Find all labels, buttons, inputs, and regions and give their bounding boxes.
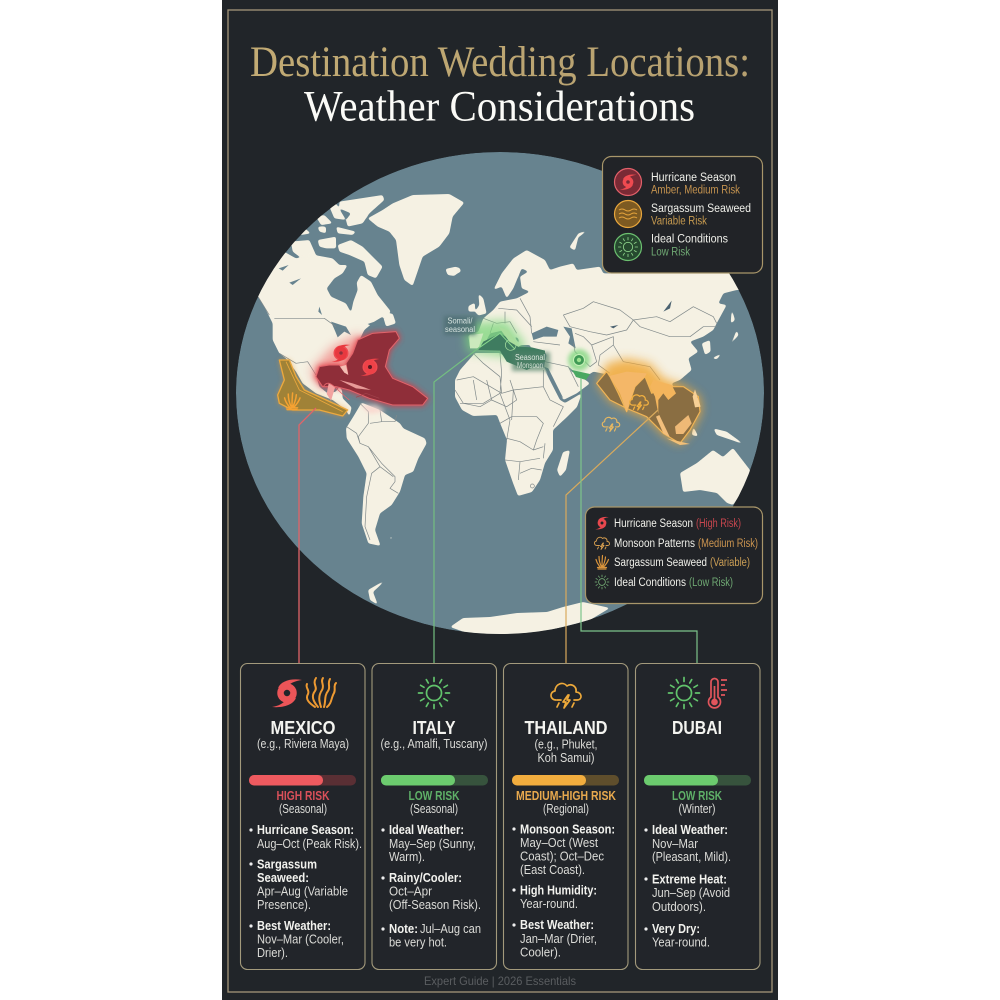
connector: dubai xyxy=(581,378,697,664)
bullets: mexico: Hurricane Season: xyxy=(257,823,354,837)
bullets: dubai: Jun–Sep (Avoid xyxy=(652,886,730,900)
risk label: low xyxy=(672,789,722,816)
label: faint seasonal tag east xyxy=(512,352,550,371)
bullets: dubai xyxy=(644,823,731,950)
bullets: mexico xyxy=(249,823,362,960)
icon: seaweed legend xyxy=(614,200,642,228)
land tint: venezuela coast xyxy=(360,405,386,414)
heading: italy: ITALY xyxy=(412,718,456,738)
risk label: high xyxy=(276,789,330,816)
panel: dubai card xyxy=(636,664,760,970)
heading: thailand: THAILAND xyxy=(524,718,608,738)
icon: seaweed small xyxy=(596,556,608,569)
connector: italy xyxy=(434,347,480,664)
icon: sun legend xyxy=(614,234,642,260)
panel: thailand card xyxy=(504,664,628,970)
footer: Expert Guide | 2026 Essentials xyxy=(424,974,576,988)
heading: dubai: DUBAI xyxy=(672,718,722,738)
bullets: italy: May–Sep (Sunny, xyxy=(389,837,476,851)
bullets: mexico: Best Weather: xyxy=(257,919,331,933)
bullets: thailand: Jan–Mar (Drier, xyxy=(520,932,597,946)
label: faint seasonal tag west: seasonal xyxy=(445,325,475,334)
bullets: italy: Jul–Aug can xyxy=(420,922,481,936)
title: Weather Considerations xyxy=(304,84,695,130)
icon: thermometer xyxy=(708,678,727,708)
heading: thailand: (e.g., Phuket, xyxy=(534,738,598,752)
legend text: Monsoon Patterns xyxy=(614,538,695,550)
map overlay: hurricane zone atlantic xyxy=(311,332,428,405)
bullets: dubai: Very Dry: xyxy=(652,922,700,936)
icon: sun xyxy=(668,678,700,708)
risk label: low: LOW RISK xyxy=(408,789,460,803)
bullets: dubai: Nov–Mar xyxy=(652,837,698,851)
risk label: high: (Seasonal) xyxy=(279,802,327,816)
heading: thailand: Koh Samui) xyxy=(538,751,594,765)
legend text xyxy=(651,172,751,258)
map overlay: mediterranean low risk xyxy=(465,320,545,370)
bullets: mexico: Aug–Oct (Peak Risk). xyxy=(257,837,362,851)
icon: monsoon cloud over ocean xyxy=(602,417,620,432)
panel: top legend xyxy=(602,156,762,273)
icon: sargassum on map xyxy=(285,393,300,410)
bullets: thailand: Coast); Oct–Dec xyxy=(520,850,604,864)
icon: monsoon small xyxy=(594,537,610,550)
bullets: italy: Note: xyxy=(389,922,418,936)
gold frame xyxy=(228,10,772,992)
risk bar: medium-high xyxy=(512,775,619,786)
risk label: low: LOW RISK xyxy=(672,789,722,803)
legend text: (Medium Risk) xyxy=(698,538,758,550)
bullets: mexico: Sargassum xyxy=(257,858,317,872)
legend text: Hurricane Season xyxy=(614,518,693,530)
map overlay: dubai ideal marker xyxy=(568,349,590,380)
bullets: dubai: Extreme Heat: xyxy=(652,872,727,886)
bullets: dubai: Outdoors). xyxy=(652,900,706,914)
risk label: low xyxy=(408,789,460,816)
bullets: thailand: May–Oct (West xyxy=(520,836,598,850)
risk bar: high xyxy=(249,775,356,786)
bullets: thailand: Cooler). xyxy=(520,946,561,960)
bullets: italy: (Off-Season Risk). xyxy=(389,898,481,912)
bullets: italy: Rainy/Cooler: xyxy=(389,871,462,885)
legend text: Amber, Medium Risk xyxy=(651,184,740,196)
panel: italy card xyxy=(372,664,496,970)
heading: italy: (e.g., Amalfi, Tuscany) xyxy=(380,737,488,751)
icon: sun xyxy=(418,678,450,708)
bullets: mexico: Apr–Aug (Variable xyxy=(257,884,348,898)
risk label: high: HIGH RISK xyxy=(276,789,330,803)
bullets: mexico: Nov–Mar (Cooler, xyxy=(257,932,344,946)
panel: dark poster background xyxy=(222,0,778,1000)
heading: thailand xyxy=(524,718,608,765)
bullets: thailand: High Humidity: xyxy=(520,884,597,898)
map overlay: southeast asia monsoon zone xyxy=(597,358,702,445)
icon: hurricane legend xyxy=(614,168,642,196)
risk label: low: (Winter) xyxy=(678,802,716,816)
bullets: italy: Oct–Apr xyxy=(389,884,432,898)
legend text: (Variable) xyxy=(710,557,750,569)
risk label: low: (Seasonal) xyxy=(410,802,458,816)
bullets: dubai: Ideal Weather: xyxy=(652,823,728,837)
label: faint seasonal tag east: Seasonal xyxy=(515,353,545,362)
bullets: italy: Ideal Weather: xyxy=(389,823,464,837)
inland water xyxy=(259,265,672,398)
legend text: Hurricane Season xyxy=(651,172,736,184)
icon: seaweed xyxy=(307,678,336,707)
legend text: Ideal Conditions xyxy=(614,577,686,589)
heading: italy xyxy=(380,718,488,751)
bullets: thailand: Monsoon Season: xyxy=(520,822,615,836)
legend text xyxy=(614,518,758,589)
bullets: thailand: Best Weather: xyxy=(520,918,594,932)
bullets: italy: Warm). xyxy=(389,850,425,864)
legend text: (Low Risk) xyxy=(689,577,733,589)
legend text: Variable Risk xyxy=(651,216,707,228)
icon: storm cloud xyxy=(551,684,581,708)
legend text: (High Risk) xyxy=(696,518,741,530)
world map globe xyxy=(236,152,764,636)
bullets: mexico: Seaweed: xyxy=(257,871,309,885)
connector: mexico xyxy=(299,408,316,664)
bullets: mexico: Presence). xyxy=(257,898,311,912)
label: faint seasonal tag west: Somali/ xyxy=(448,316,473,326)
icon: sun small xyxy=(595,575,609,589)
risk label: medium-high: (Regional) xyxy=(543,802,589,816)
risk bar: low xyxy=(381,775,488,786)
connector: thailand xyxy=(566,410,658,664)
icon: hurricane small xyxy=(595,517,609,529)
title: Destination Wedding Locations: xyxy=(250,39,750,86)
title xyxy=(250,39,750,130)
legend text: Sargassum Seaweed xyxy=(614,557,707,569)
country borders xyxy=(256,293,717,540)
panel: mexico card xyxy=(240,664,365,970)
bullets: italy xyxy=(381,823,481,950)
legend text: Ideal Conditions xyxy=(651,234,728,246)
heading: mexico: (e.g., Riviera Maya) xyxy=(257,737,349,751)
legend text: Low Risk xyxy=(651,246,690,258)
heading: mexico xyxy=(257,718,349,751)
risk label: medium-high: MEDIUM-HIGH RISK xyxy=(516,789,616,803)
icon: hurricane over florida xyxy=(332,345,350,362)
bullets: dubai: (Pleasant, Mild). xyxy=(652,850,731,864)
icon: monsoon cloud inside zone xyxy=(630,395,648,410)
bullets: mexico: Drier). xyxy=(257,946,288,960)
map overlay: sargassum zone pacific mexico xyxy=(278,360,348,416)
bullets: dubai: Year-round. xyxy=(652,936,710,950)
bullets: thailand: Year-round. xyxy=(520,897,578,911)
panel: lower legend xyxy=(586,507,762,604)
heading: mexico: MEXICO xyxy=(270,718,336,738)
risk bar: low xyxy=(644,775,751,786)
label: faint seasonal tag west xyxy=(444,316,476,335)
bullets: thailand: (East Coast). xyxy=(520,863,585,877)
bullets: thailand xyxy=(512,822,615,960)
risk label: medium-high xyxy=(516,789,616,816)
icon: hurricane in atlantic xyxy=(361,359,379,376)
bullets: italy: be very hot. xyxy=(389,936,447,950)
label: faint seasonal tag east: Monsoon xyxy=(517,361,543,370)
legend text: Sargassum Seaweed xyxy=(651,203,751,215)
land masses xyxy=(249,194,750,636)
icon: hurricane xyxy=(272,679,302,707)
